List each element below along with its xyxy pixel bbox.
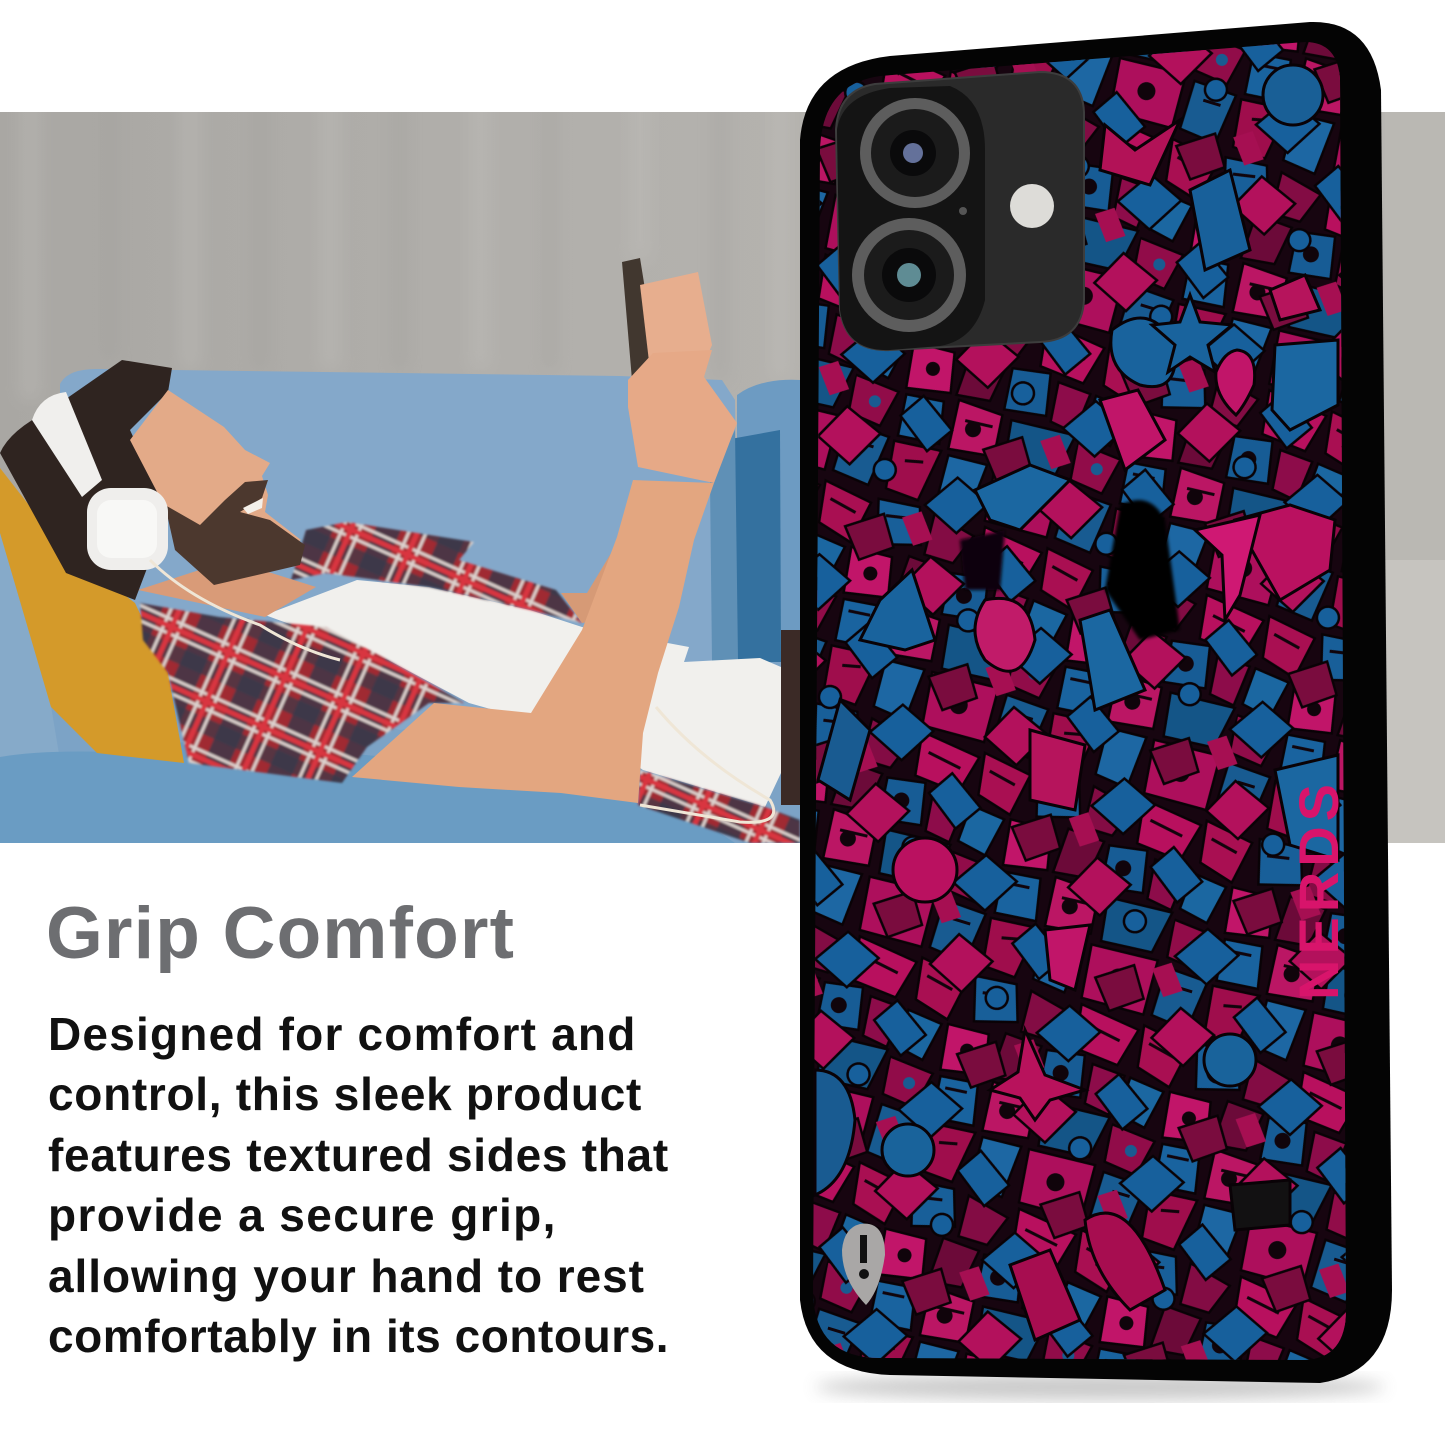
lower lens — [852, 218, 966, 332]
body text: features textured sides that — [48, 1129, 669, 1181]
heading: Grip Comfort — [46, 893, 515, 974]
lens housing — [837, 86, 985, 350]
body text: control, this sleek product — [48, 1068, 642, 1120]
neck — [138, 570, 316, 617]
logo badge — [842, 1224, 885, 1305]
body text: Designed for comfort and — [48, 1008, 637, 1060]
upper lens — [860, 98, 970, 208]
sofa left side — [0, 530, 60, 760]
teeth — [243, 498, 263, 514]
body text: provide a secure grip, — [48, 1189, 557, 1241]
doodle artwork — [813, 42, 1350, 1360]
sofa back — [60, 369, 736, 540]
ear cup — [87, 488, 168, 570]
beard — [165, 480, 305, 585]
jeans — [781, 630, 801, 805]
sofa body — [51, 662, 800, 843]
vertical word: NERDS — [1287, 779, 1350, 1000]
camera island — [836, 72, 1084, 350]
sofa arm — [737, 380, 800, 665]
body text: allowing your hand to rest — [48, 1250, 645, 1302]
pillow — [0, 468, 184, 763]
face — [130, 390, 301, 541]
headphone band — [32, 392, 102, 497]
near arm — [352, 480, 714, 803]
photo: man relaxing on a sofa with a smartphone — [0, 90, 1445, 843]
hand and phone — [622, 258, 648, 376]
flash — [1010, 184, 1054, 228]
sofa seat — [0, 740, 735, 843]
hair — [0, 360, 172, 600]
t-shirt — [265, 580, 781, 807]
body text: comfortably in its contours. — [48, 1310, 669, 1362]
phone case with doodle back — [800, 22, 1392, 1400]
darkening wash over doodle — [813, 42, 1346, 1360]
black bombs — [1105, 500, 1180, 640]
far arm — [561, 480, 640, 623]
plaid shirt — [140, 522, 800, 843]
body text — [48, 1008, 669, 1362]
wall — [0, 112, 1385, 521]
cable — [150, 560, 774, 822]
